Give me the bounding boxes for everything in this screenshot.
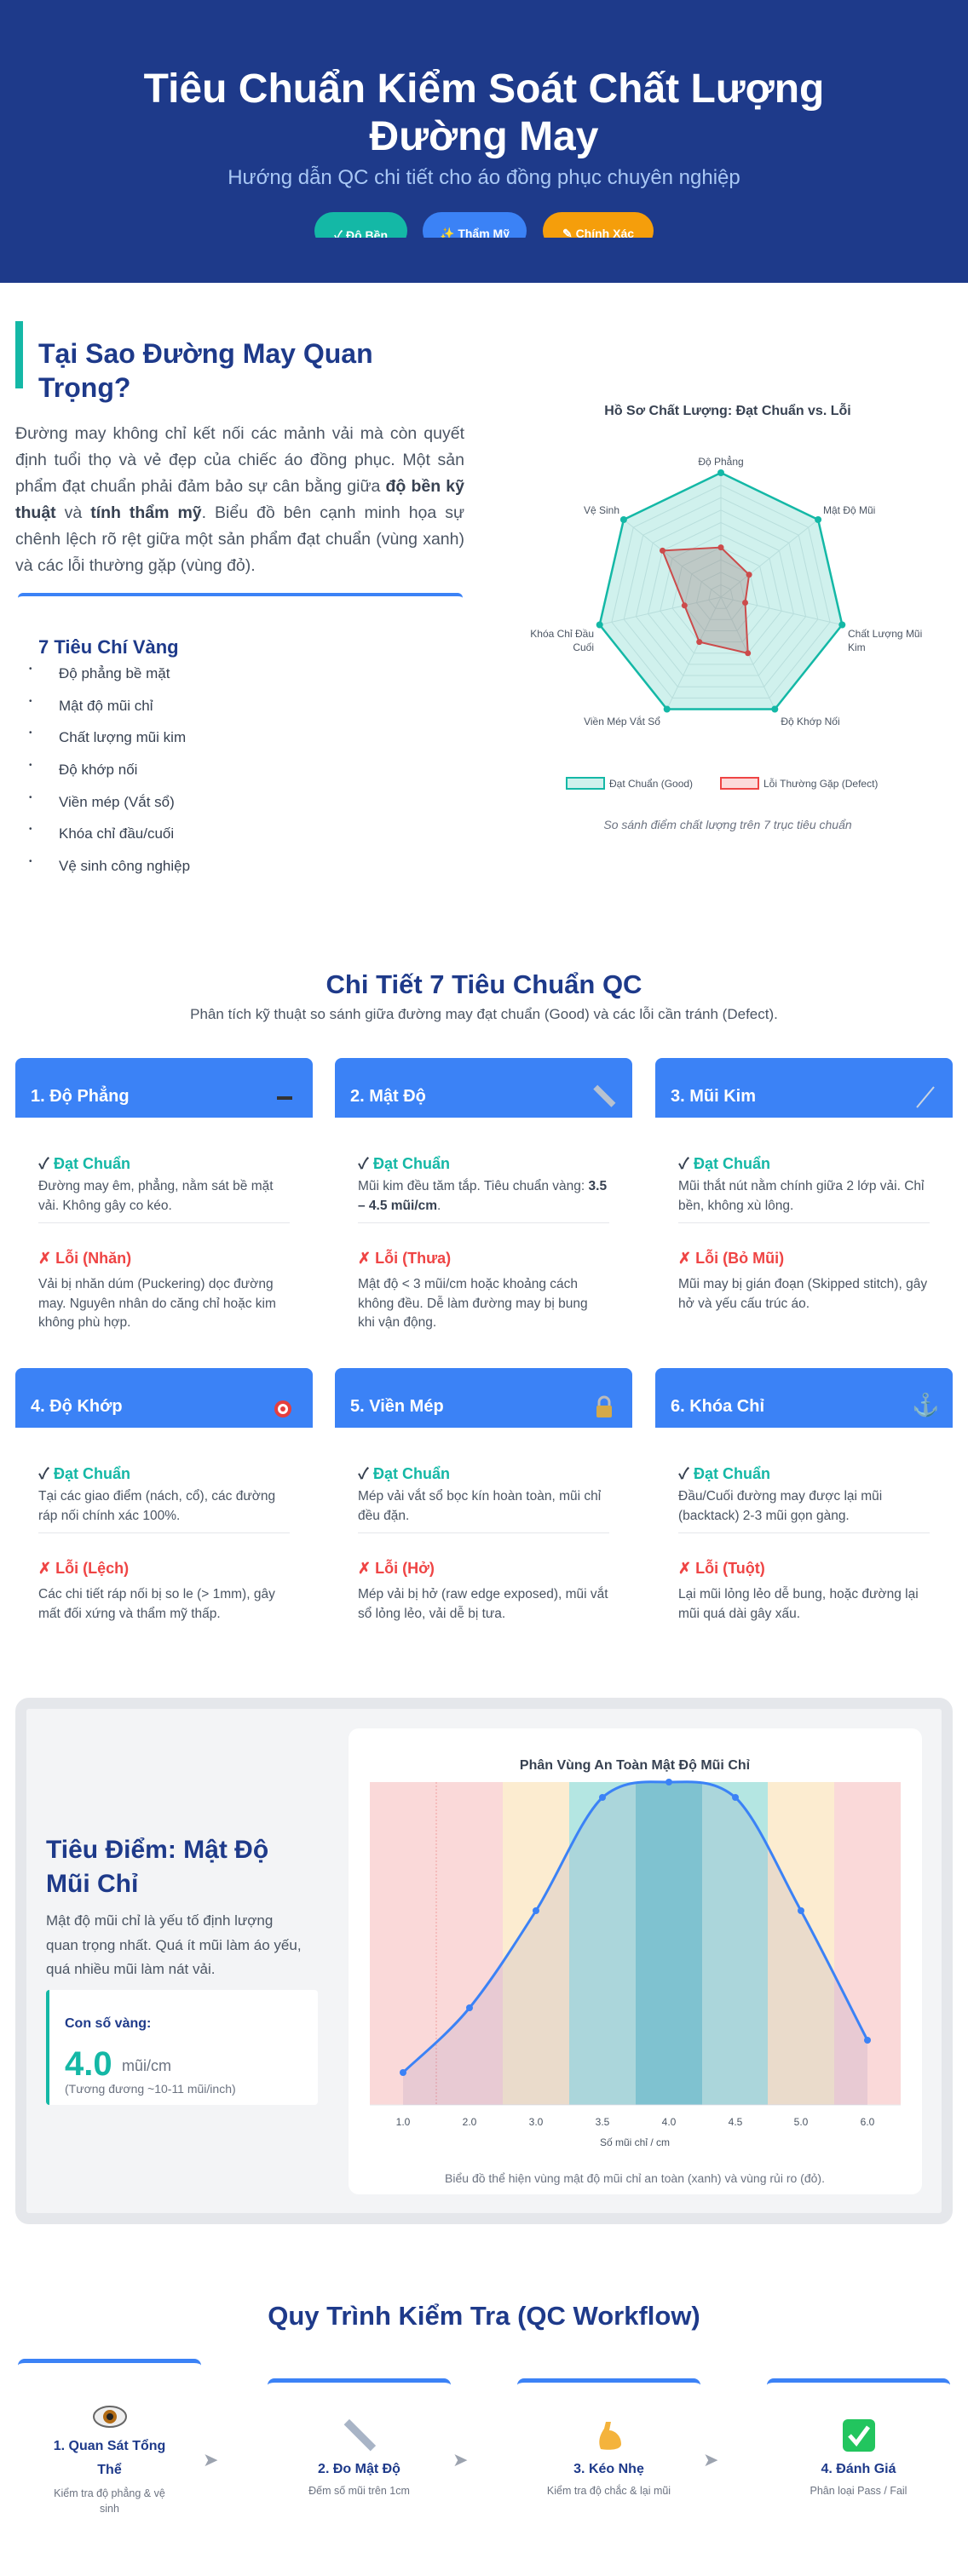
x axis labels: 4.0 xyxy=(662,2116,677,2128)
x axis labels: 1.0 xyxy=(396,2116,411,2128)
icon: check xyxy=(843,2419,875,2452)
card 6: khoa chi: ✓ Đạt Chuẩn xyxy=(678,1465,770,1482)
card header xyxy=(335,1368,632,1428)
card 4: do khop: Tại các giao điểm (nách, cổ), các đường ráp nối chính xác 100%. xyxy=(38,1489,275,1523)
arrow 3: ➤ xyxy=(703,2449,718,2470)
step 4 xyxy=(767,2378,950,2527)
axis labels: Chất Lượng Mũi xyxy=(848,628,922,640)
workflow title: Quy Trình Kiểm Tra (QC Workflow) xyxy=(268,2301,700,2331)
heading: why seams matter: Tại Sao Đường May Quan xyxy=(38,338,373,369)
panel: stitch density focus xyxy=(15,1698,953,2224)
arrow 2: ➤ xyxy=(452,2449,468,2470)
axis labels: Độ Khớp Nối xyxy=(781,716,840,727)
badges xyxy=(314,212,654,238)
criteria list: Khóa chỉ đầu/cuối xyxy=(59,825,174,842)
golden number callout: Con số vàng: xyxy=(65,2016,151,2031)
chart title: Hồ Sơ Chất Lượng: Đạt Chuẩn vs. Lỗi xyxy=(604,402,851,418)
card 3: mui kim: ✓ Đạt Chuẩn xyxy=(678,1155,770,1172)
x axis labels: 6.0 xyxy=(861,2116,875,2128)
criteria list: • xyxy=(29,825,32,834)
focus heading: Mũi Chỉ xyxy=(46,1870,138,1898)
zones xyxy=(370,1782,901,2105)
density chart xyxy=(370,1758,901,2185)
step 2: 2. Đo Mật Độ xyxy=(318,2462,400,2476)
icon: ruler xyxy=(344,2419,376,2452)
criteria list: Vệ sinh công nghiệp xyxy=(59,858,190,874)
card 4: do khop: ✓ Đạt Chuẩn xyxy=(38,1465,130,1482)
accent bar xyxy=(15,321,23,388)
golden number callout: mũi/cm xyxy=(122,2057,171,2074)
legend: Đạt Chuẩn (Good) xyxy=(609,778,693,790)
step 1 xyxy=(18,2359,201,2546)
step 4: Phân loại Pass / Fail xyxy=(810,2485,907,2497)
x axis labels xyxy=(396,2116,875,2148)
axis labels: Kim xyxy=(848,641,866,653)
step 4: 4. Đánh Giá xyxy=(821,2462,896,2476)
step 2: Đếm số mũi trên 1cm xyxy=(308,2485,410,2497)
legend xyxy=(567,777,878,790)
card header xyxy=(655,1058,953,1118)
card header: ⚓ xyxy=(912,1392,939,1417)
step 2 xyxy=(268,2378,451,2527)
card header xyxy=(15,1368,313,1428)
badge: chinh xac xyxy=(543,212,654,250)
card 2: mat do: Mũi kim đều tăm tắp. Tiêu chuẩn vàng: 3.5 – 4.5 mũi/cm. xyxy=(358,1179,607,1213)
arrow 1: ➤ xyxy=(203,2449,218,2470)
card 1: do phang: Vải bị nhăn dúm (Puckering) dọc đường may. Nguyên nhân do căng chỉ hoặc kim không phù hợp. xyxy=(38,1277,276,1330)
criteria list: • xyxy=(29,761,32,770)
series: good xyxy=(596,469,845,712)
criteria list: Độ phẳng bề mặt xyxy=(59,665,170,681)
header banner xyxy=(0,0,968,283)
criteria list xyxy=(29,664,190,874)
density curve xyxy=(400,1779,871,2105)
axis labels: Mật Độ Mũi xyxy=(823,504,875,516)
card 6: khoa chi: Đầu/Cuối đường may được lại mũi (backtack) 2-3 mũi gọn gàng. xyxy=(678,1489,882,1523)
card 2: mat do: ✓ Đạt Chuẩn xyxy=(358,1155,450,1172)
golden number callout: 4.0 xyxy=(65,2045,112,2083)
criteria list: Chất lượng mũi kim xyxy=(59,729,186,745)
card 5: vien mep: ✓ Đạt Chuẩn xyxy=(358,1465,450,1482)
criteria heading: 7 Tiêu Chí Vàng xyxy=(38,636,179,658)
focus heading xyxy=(46,1836,268,1898)
axis labels: Vệ Sinh xyxy=(584,504,619,516)
legend: Lỗi Thường Gặp (Defect) xyxy=(763,777,878,790)
title xyxy=(144,66,824,159)
axis labels: Viền Mép Vắt Sổ xyxy=(584,715,660,727)
card 6: khoa chi: Lại mũi lỏng lẻo dễ bung, hoặc đường lại mũi quá dài gây xấu. xyxy=(678,1587,919,1620)
chart caption: So sánh điểm chất lượng trên 7 trục tiêu chuẩn xyxy=(603,818,852,831)
card header: 6. Khóa Chỉ xyxy=(671,1397,764,1416)
criteria list: • xyxy=(29,857,32,866)
badge: do ben xyxy=(314,212,407,250)
x axis labels: 5.0 xyxy=(794,2116,809,2128)
x axis labels: 3.5 xyxy=(596,2116,610,2128)
heading: why seams matter xyxy=(38,338,373,403)
subtitle: Hướng dẫn QC chi tiết cho áo đồng phục chuyên nghiệp xyxy=(228,166,740,189)
focus heading: Tiêu Điểm: Mật Độ xyxy=(46,1836,268,1864)
intro paragraph: Đường may không chỉ kết nối các mảnh vải mà còn quyết định tuổi thọ và vẻ đẹp của chiếc áo đồng phục. Một sản phẩm đạt chuẩn phải đảm bảo sự cân bằng giữa độ bền kỹ thuật và tính thẩm mỹ. Biểu đồ bên cạnh minh họa sự chênh lệch rõ rệt giữa một sản phẩm đạt chuẩn (vùng xanh) và các lỗi thường gặp (vùng đỏ). xyxy=(15,424,464,575)
chart title: Phân Vùng An Toàn Mật Độ Mũi Chỉ xyxy=(520,1758,751,1773)
card 5: vien mep: ✗ Lỗi (Hở) xyxy=(358,1560,435,1577)
x axis labels: 3.0 xyxy=(529,2116,544,2128)
card header xyxy=(655,1368,953,1428)
heading: why seams matter: Trọng? xyxy=(38,372,130,403)
card 1: do phang: ✓ Đạt Chuẩn xyxy=(38,1155,130,1172)
series: defect xyxy=(660,544,752,656)
axis labels xyxy=(530,455,922,727)
radar chart xyxy=(530,402,922,831)
card 3: mui kim: ✗ Lỗi (Bỏ Mũi) xyxy=(678,1250,784,1267)
step 1: 1. Quan Sát Tổng Thể xyxy=(54,2439,165,2477)
panel: 7 golden criteria xyxy=(18,593,463,891)
card 2: mat do xyxy=(335,1058,632,1330)
card header: 1. Độ Phẳng xyxy=(31,1087,130,1106)
section subtitle: Phân tích kỹ thuật so sánh giữa đường may đạt chuẩn (Good) và các lỗi cần tránh (Defect). xyxy=(190,1006,778,1022)
step 3 xyxy=(517,2378,700,2527)
badge: tham my xyxy=(423,212,527,250)
criteria list: • xyxy=(29,793,32,802)
card 4: do khop xyxy=(15,1368,313,1620)
icon: eye xyxy=(93,2406,127,2428)
card header: 5. Viền Mép xyxy=(350,1397,444,1416)
card 3: mui kim: Mũi thắt nút nằm chính giữa 2 lớp vải. Chỉ bền, không xù lông. xyxy=(678,1179,924,1213)
criteria list: • xyxy=(29,664,32,674)
axis labels: Khóa Chỉ Đầu xyxy=(530,628,594,640)
card header xyxy=(335,1058,632,1118)
card 1: do phang xyxy=(15,1058,313,1330)
criteria list: Mật độ mũi chỉ xyxy=(59,698,153,714)
card 4: do khop: Các chi tiết ráp nối bị so le (> 1mm), gây mất đối xứng và thẩm mỹ thấp. xyxy=(38,1587,275,1620)
card 6: khoa chi: ✗ Lỗi (Tuột) xyxy=(678,1560,765,1577)
x axis labels: 2.0 xyxy=(463,2116,477,2128)
golden number callout: (Tương đương ~10-11 mũi/inch) xyxy=(65,2082,236,2096)
card 6: khoa chi xyxy=(655,1368,953,1620)
icon: muscle xyxy=(599,2422,621,2450)
section title: 7 standards detail: Chi Tiết 7 Tiêu Chuẩn QC xyxy=(326,969,642,999)
chart caption: Biểu đồ thể hiện vùng mật độ mũi chỉ an toàn (xanh) và vùng rủi ro (đỏ). xyxy=(445,2171,825,2185)
title: Tiêu Chuẩn Kiểm Soát Chất Lượng xyxy=(144,66,824,112)
x axis labels: Số mũi chỉ / cm xyxy=(600,2136,670,2148)
criteria list: Viền mép (Vắt sổ) xyxy=(59,794,175,810)
card 1: do phang: Đường may êm, phẳng, nằm sát bề mặt vải. Không gây co kéo. xyxy=(38,1179,274,1213)
golden number callout xyxy=(46,1990,318,2105)
criteria list: Độ khớp nối xyxy=(59,762,137,778)
card header: 2. Mật Độ xyxy=(350,1087,426,1106)
card header: 4. Độ Khớp xyxy=(31,1397,123,1416)
axis labels: Độ Phẳng xyxy=(698,455,744,468)
step 1: Kiểm tra độ phẳng & vệ sinh xyxy=(54,2487,165,2515)
card header xyxy=(15,1058,313,1118)
card 4: do khop: ✗ Lỗi (Lệch) xyxy=(38,1560,129,1577)
card 3: mui kim xyxy=(655,1058,953,1310)
step 3: 3. Kéo Nhẹ xyxy=(573,2462,644,2476)
criteria list: • xyxy=(29,697,32,706)
card 2: mat do: ✗ Lỗi (Thưa) xyxy=(358,1250,451,1267)
card 2: mat do: Mật độ < 3 mũi/cm hoặc khoảng cách không đều. Dễ làm đường may bị bung khi vận động. xyxy=(358,1277,588,1330)
card 5: vien mep xyxy=(335,1368,632,1620)
title: Đường May xyxy=(370,114,598,159)
focus paragraph: Mật độ mũi chỉ là yếu tố định lượng quan trọng nhất. Quá ít mũi làm áo yếu, quá nhiều mũi làm nát vải. xyxy=(46,1912,302,1977)
axis labels: Cuối xyxy=(573,641,594,653)
x axis labels: 4.5 xyxy=(729,2116,743,2128)
card 1: do phang: ✗ Lỗi (Nhăn) xyxy=(38,1250,131,1267)
criteria list: • xyxy=(29,728,32,738)
card 5: vien mep: Mép vải bị hở (raw edge exposed), mũi vắt sổ lỏng lẻo, vải dễ bị tưa. xyxy=(358,1587,608,1620)
card 3: mui kim: Mũi may bị gián đoạn (Skipped stitch), gây hở và yếu cấu trúc áo. xyxy=(678,1277,927,1310)
chart card: density zones xyxy=(349,1728,922,2194)
card header: 3. Mũi Kim xyxy=(671,1087,756,1106)
card 5: vien mep: Mép vải vắt sổ bọc kín hoàn toàn, mũi chỉ đều đặn. xyxy=(358,1489,601,1523)
step 3: Kiểm tra độ chắc & lại mũi xyxy=(547,2485,671,2497)
